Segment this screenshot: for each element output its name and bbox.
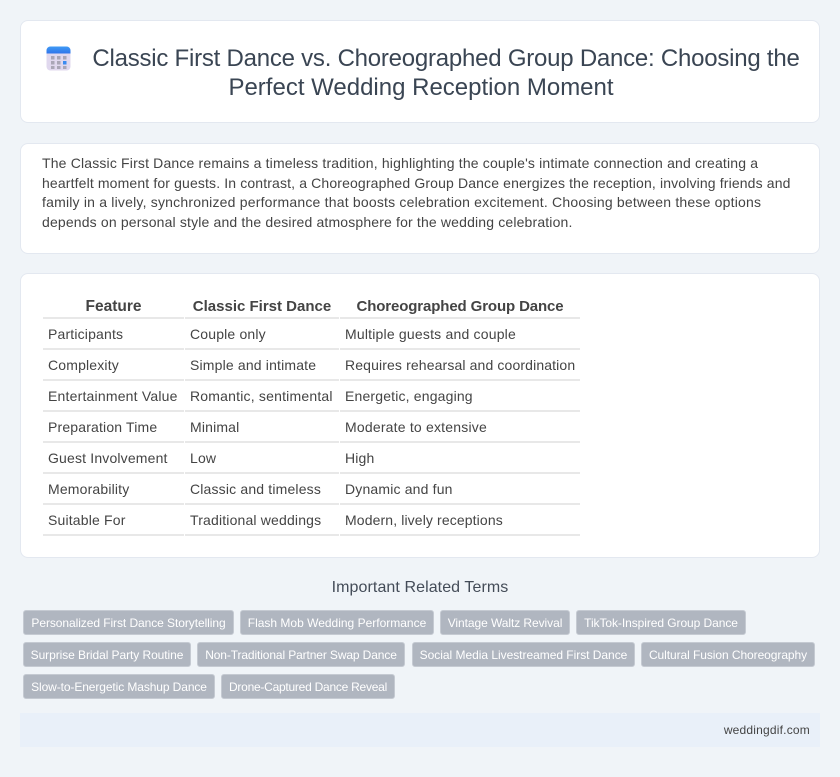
table header: Classic First Dance bbox=[193, 298, 331, 315]
tag: Surprise Bridal Party Routine bbox=[31, 648, 183, 662]
related terms tags bbox=[23, 610, 815, 699]
intro text: family in a lively, synchronized performance that boosts celebration excitement. Choosing between these options bbox=[42, 194, 761, 210]
tag bbox=[412, 642, 635, 667]
tag: Flash Mob Wedding Performance bbox=[248, 616, 426, 630]
intro text: The Classic First Dance remains a timeless tradition, highlighting the couple's intimate connection and creating a bbox=[42, 155, 758, 171]
tag: Vintage Waltz Revival bbox=[448, 616, 562, 630]
row: entertainment value: Entertainment Value bbox=[48, 388, 178, 404]
footer bar bbox=[20, 713, 820, 747]
comparison table: Romantic, sentimental bbox=[190, 388, 333, 404]
table header: Feature bbox=[86, 298, 142, 315]
tag bbox=[240, 610, 434, 635]
icon: calendar bbox=[46, 46, 70, 70]
comparison table: Traditional weddings bbox=[190, 512, 321, 528]
comparison table card bbox=[20, 273, 820, 558]
tag: Slow-to-Energetic Mashup Dance bbox=[31, 680, 207, 694]
comparison table: Multiple guests and couple bbox=[345, 326, 516, 342]
comparison table: Low bbox=[190, 450, 216, 466]
comparison table: Moderate to extensive bbox=[345, 419, 487, 435]
row: memorability: Memorability bbox=[48, 481, 129, 497]
comparison table: Simple and intimate bbox=[190, 357, 316, 373]
tag: Drone-Captured Dance Reveal bbox=[229, 680, 387, 694]
comparison table: Dynamic and fun bbox=[345, 481, 453, 497]
comparison table: Minimal bbox=[190, 419, 239, 435]
tag: Social Media Livestreamed First Dance bbox=[420, 648, 627, 662]
comparison table: Energetic, engaging bbox=[345, 388, 473, 404]
row: suitable for: Suitable For bbox=[48, 512, 126, 528]
comparison table bbox=[43, 298, 580, 536]
tag: Cultural Fusion Choreography bbox=[649, 648, 807, 662]
tag bbox=[440, 610, 570, 635]
tag bbox=[576, 610, 746, 635]
row: complexity: Complexity bbox=[48, 357, 119, 373]
tag bbox=[23, 610, 234, 635]
comparison table: Classic and timeless bbox=[190, 481, 321, 497]
tag bbox=[23, 642, 191, 667]
row: participants: Participants bbox=[48, 326, 123, 342]
row: preparation time: Preparation Time bbox=[48, 419, 157, 435]
footer source: weddingdif.com bbox=[724, 723, 810, 737]
table header: Choreographed Group Dance bbox=[356, 298, 564, 315]
row: guest involvement: Guest Involvement bbox=[48, 450, 168, 466]
tag: Personalized First Dance Storytelling bbox=[31, 616, 226, 630]
intro text: heartfelt moment for guests. In contrast, a Choreographed Group Dance energizes the reception, involving friends and bbox=[42, 174, 791, 190]
related terms heading: Important Related Terms bbox=[332, 579, 508, 596]
tag bbox=[221, 674, 395, 699]
title: Perfect Wedding Reception Moment bbox=[228, 74, 614, 101]
intro text: depends on personal style and the desired atmosphere for the wedding celebration. bbox=[42, 214, 573, 230]
tag: Non-Traditional Partner Swap Dance bbox=[205, 648, 397, 662]
header card bbox=[20, 20, 820, 123]
tag bbox=[197, 642, 405, 667]
table header bbox=[86, 298, 564, 315]
comparison table: High bbox=[345, 450, 374, 466]
comparison table: Modern, lively receptions bbox=[345, 512, 503, 528]
title bbox=[92, 45, 800, 101]
intro text bbox=[42, 155, 791, 230]
tag: TikTok-Inspired Group Dance bbox=[584, 616, 738, 630]
tag bbox=[641, 642, 815, 667]
comparison table: Couple only bbox=[190, 326, 266, 342]
tag bbox=[23, 674, 215, 699]
intro paragraph card bbox=[20, 143, 820, 254]
title: Classic First Dance vs. Choreographed Group Dance: Choosing the bbox=[92, 45, 800, 72]
comparison table: Requires rehearsal and coordination bbox=[345, 357, 575, 373]
